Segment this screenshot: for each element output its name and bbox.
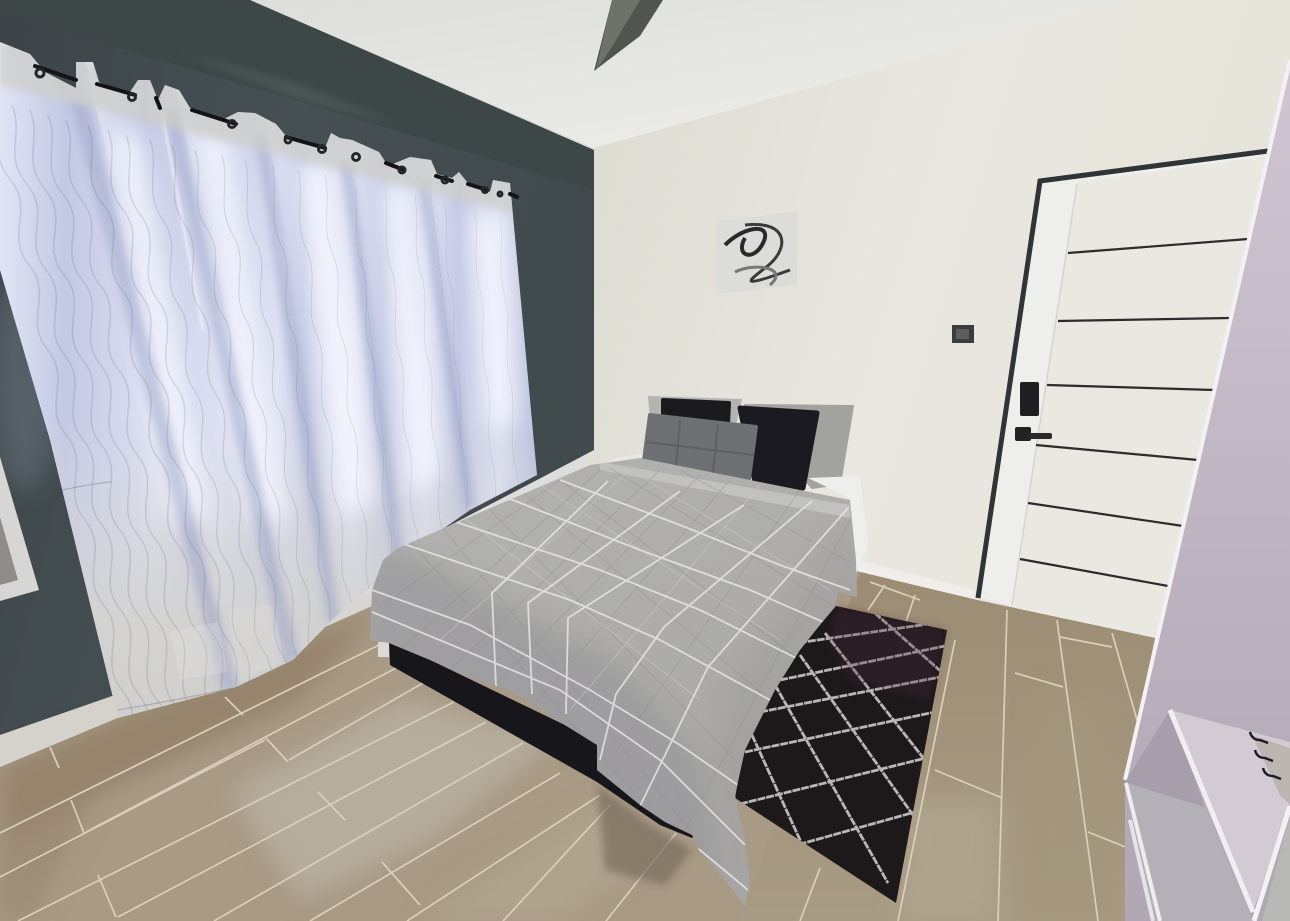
mattress edge — [600, 452, 868, 574]
front pillows — [643, 408, 817, 488]
closet shelves — [1125, 710, 1290, 921]
ceiling fan blade — [594, 0, 663, 71]
wall art — [715, 211, 798, 294]
wall switch — [952, 325, 974, 343]
dark left wall — [0, 10, 594, 738]
rug — [735, 606, 947, 903]
duvet with quilted grid — [360, 458, 870, 906]
door lock and handle — [1015, 382, 1052, 441]
dark soffit band — [0, 0, 594, 190]
right wall — [586, 0, 1290, 921]
back pillows — [648, 396, 853, 488]
curtain rod with grommets — [35, 66, 517, 197]
bed shadow on floor — [597, 785, 692, 885]
ceiling — [250, 0, 1125, 148]
bed base — [378, 640, 700, 838]
floor — [0, 465, 1160, 921]
curtains — [0, 42, 537, 718]
skirting board left wall — [0, 592, 372, 767]
door — [978, 151, 1268, 638]
picture frame on left wall — [0, 457, 39, 601]
basket on shelf — [1250, 732, 1290, 805]
lavender closet panel — [1125, 60, 1290, 921]
skirting board behind bed — [858, 560, 975, 602]
